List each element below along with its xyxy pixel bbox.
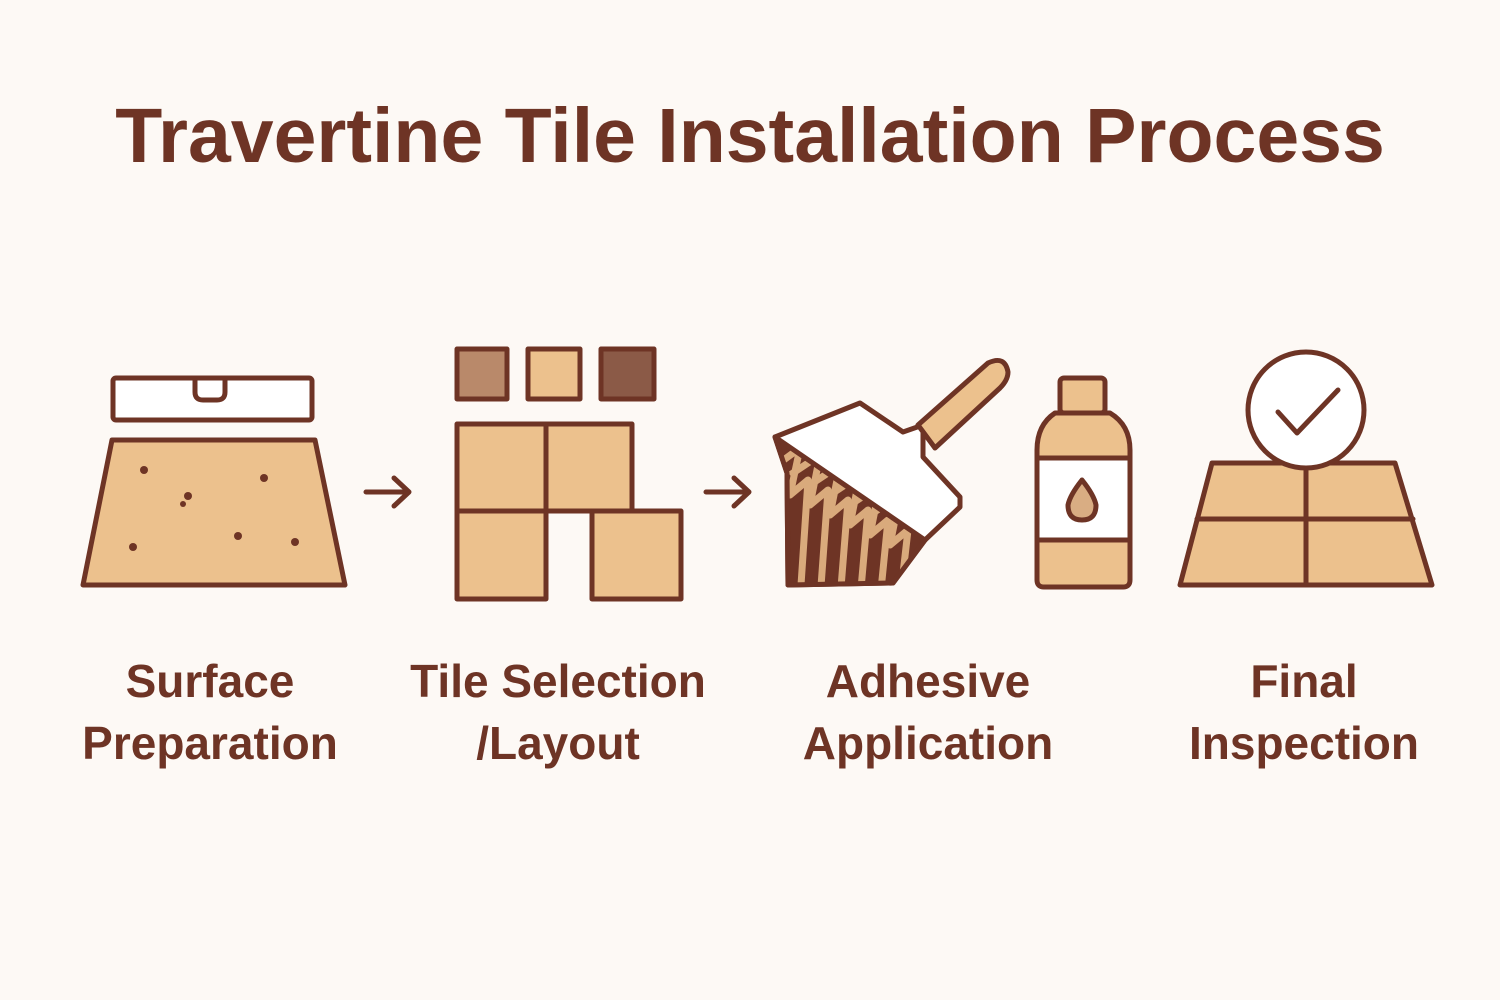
icon: bottle — [1037, 378, 1130, 587]
arrow 2 — [706, 478, 749, 506]
label: adhesive application: Application — [803, 717, 1053, 769]
label: surface preparation — [82, 655, 338, 769]
icon: brush — [770, 360, 1008, 600]
label: final inspection: Inspection — [1189, 717, 1419, 769]
label: final inspection — [1189, 655, 1419, 769]
label: tile selection — [410, 655, 706, 769]
title: Travertine Tile Installation Process — [115, 93, 1385, 179]
arrow 1 — [366, 478, 409, 506]
label: surface preparation: Preparation — [82, 717, 338, 769]
label: adhesive application: Adhesive — [826, 655, 1030, 707]
label: tile selection: Tile Selection — [410, 655, 706, 707]
icon: surface preparation — [83, 378, 345, 585]
label: adhesive application — [803, 655, 1053, 769]
icon: tile selection — [457, 349, 681, 599]
label: surface preparation: Surface — [126, 655, 294, 707]
label: final inspection: Final — [1250, 655, 1358, 707]
label: tile selection: /Layout — [476, 717, 640, 769]
icon: final inspection — [1180, 352, 1432, 585]
